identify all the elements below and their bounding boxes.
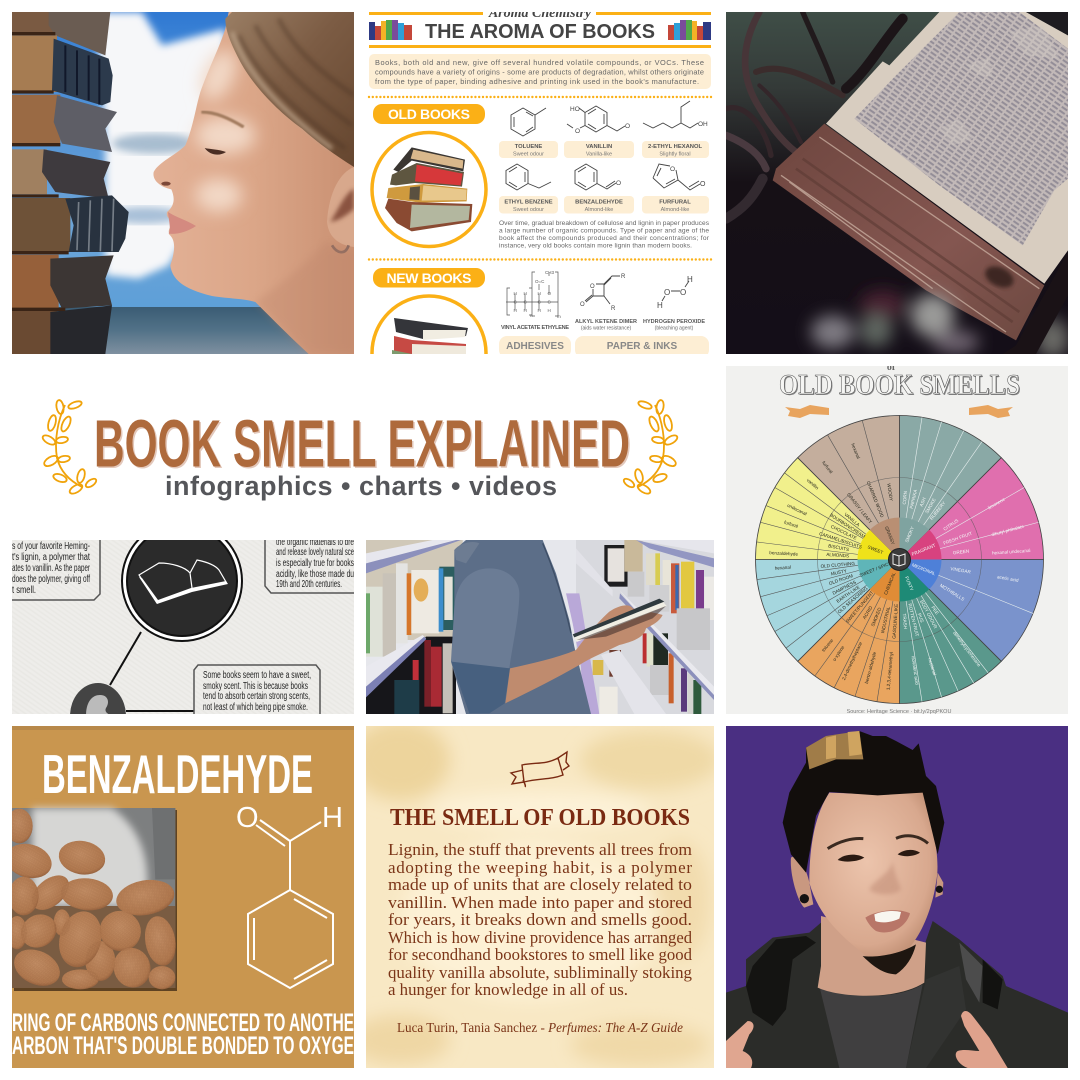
intro text block: compounds have a variety of origins - some are products of degradation, whilst others originate — [375, 68, 704, 76]
hand and forearm holding a book — [505, 599, 667, 703]
wheel labels, dark text: OLD CLOTHING — [820, 561, 856, 569]
icon: book row right — [668, 20, 711, 40]
wheel labels, light text: MOTHBALLS — [939, 583, 965, 602]
wheel labels, light text: CORN — [902, 491, 908, 505]
quote text: for years, it breaks down and smells good. — [388, 910, 692, 929]
icon: book row left — [369, 20, 412, 40]
label: hydrogen peroxide: (bleaching agent) — [655, 326, 694, 332]
dark spokes left half — [757, 420, 893, 702]
badge: adhesives: ADHESIVES — [506, 341, 564, 352]
badge: old books — [373, 104, 485, 124]
quote text: a hunger for knowledge in all of us. — [388, 980, 628, 999]
molecule: hydrogen peroxide: H — [657, 301, 663, 310]
wheel labels, light text: PUS — [917, 612, 925, 623]
wheel labels, dark text: EARTH-LIKE — [836, 585, 861, 604]
text block: old books explanation — [499, 220, 710, 250]
molecule: toluene — [511, 108, 546, 136]
mouth with teeth — [865, 910, 910, 932]
wheel labels, dark text — [769, 443, 899, 690]
molecule: benzaldehyde — [575, 164, 621, 190]
molecule: vinyl acetate ethylene: C — [524, 300, 528, 304]
title block — [42, 399, 678, 501]
wheel labels, dark text: CARAMEL/BISCUITS — [819, 531, 863, 550]
quote text: for secondhand bookstores to smell like good — [388, 945, 692, 964]
icon: laurel left — [41, 399, 98, 496]
wheel labels, dark text: CHARRED WOOD — [866, 480, 885, 519]
right bookshelf — [566, 540, 714, 714]
wheel labels, dark text: GRASSY / LEAFY — [846, 492, 873, 525]
white spokes right half — [906, 417, 1039, 702]
wheel labels, dark text: BOURBON/CREAM — [829, 512, 866, 539]
nose shadow — [869, 859, 901, 894]
compound label: 2-ethyl hexanol: Slightly floral — [659, 152, 691, 158]
badge: adhesives — [499, 336, 571, 358]
text box: lignin: ates to vanillin. As the paper — [12, 563, 90, 574]
molecule: vinyl acetate ethylene: m — [557, 314, 561, 319]
face — [809, 791, 937, 960]
wheel labels, light text — [902, 488, 1031, 685]
text box: lignin: t's lignin, a polymer that — [12, 552, 90, 563]
wheel labels, dark text: OLD SEASONING — [837, 586, 869, 615]
badge: new books — [373, 268, 485, 288]
wheel labels, dark text: ALMONDS — [826, 552, 849, 558]
compound label: 2-ethyl hexanol: 2-ETHYL HEXANOL — [648, 144, 702, 150]
label: hydrogen peroxide: HYDROGEN PEROXIDE — [643, 319, 705, 325]
woman's face in profile — [153, 12, 354, 354]
molecule: vinyl acetate ethylene — [506, 270, 561, 319]
intro text block: Books, both old and new, give off several hundred volatile compounds, or VOCs. These — [375, 58, 704, 67]
wheel labels, dark text: furfural — [821, 460, 834, 474]
woman's hair — [225, 12, 354, 167]
molecule: furfural — [653, 164, 706, 190]
caption text — [12, 1009, 354, 1060]
wheel labels, dark text: ACRID — [862, 605, 874, 620]
text box: lignin: t smell. — [12, 585, 36, 596]
ear and earring — [327, 167, 354, 252]
compound label: benzaldehyde: BENZALDEHYDE — [575, 200, 623, 206]
compound label: toluene — [499, 141, 558, 158]
left ear and gauge — [791, 857, 813, 908]
wheel labels, light text: TRASH — [902, 613, 908, 629]
wheel labels, light text: FUSTY — [904, 576, 914, 592]
subtitle: infographics • charts • videos — [165, 471, 557, 501]
wheel labels, dark text: INDUSTRIAL — [880, 606, 891, 634]
panel: aroma of books infographic — [368, 12, 712, 354]
heading: the smell of old books: THE SMELL OF OLD BOOKS — [390, 805, 690, 831]
wheel labels, dark text: benzo-aldehyde — [864, 651, 877, 684]
molecule: hydrogen peroxide: O — [680, 288, 686, 297]
wheel labels, dark text: DAMPNESS — [832, 580, 857, 596]
icon: ribbon banner — [511, 752, 569, 787]
molecule: vanillin: O — [575, 128, 580, 135]
intro text block — [369, 54, 711, 89]
heading: THE AROMA OF BOOKS — [425, 21, 655, 43]
wheel labels, light text: isovaleric acid — [911, 656, 920, 685]
icon: open book medallion — [122, 521, 242, 641]
compound label: furfural — [642, 196, 709, 214]
molecule: vinyl acetate ethylene: H — [538, 308, 541, 313]
compound label: toluene: Sweet odour — [513, 152, 544, 158]
molecule: vinyl acetate ethylene: H — [524, 291, 527, 296]
icon: laurel right — [622, 399, 679, 496]
icon: wheel hub book — [888, 548, 910, 570]
badge: old books: OLD BOOKS — [388, 106, 470, 122]
text block: old books explanation: instance, very old books contain more lignin than modern books. — [499, 242, 692, 250]
wheel chart — [756, 416, 1044, 704]
wheel labels, dark text: toluene — [821, 638, 835, 653]
wheel labels, light text: heptanal — [927, 657, 937, 676]
molecule: vanillin — [567, 106, 630, 135]
left hand — [726, 1021, 754, 1068]
top shade — [12, 726, 354, 730]
text box: pipe smoke — [194, 665, 320, 714]
text box: organic materials — [265, 537, 354, 593]
compound label: ethyl benzene — [499, 196, 558, 214]
old book pages — [826, 12, 1068, 284]
molecule: alkyl ketene dimer: O — [580, 302, 585, 308]
t-shirt — [819, 984, 923, 1068]
panel: man reading in library photo — [366, 540, 714, 714]
wheel labels, dark text: 1,2,3,4-tetramethyl — [886, 652, 894, 690]
quote text: made up of units that are closely related to — [388, 875, 692, 894]
wheel labels, light text: hexanal undecanal — [992, 548, 1031, 556]
compound label: benzaldehyde: Almond-like — [585, 207, 613, 213]
molecule: vinyl acetate ethylene: H — [524, 308, 527, 313]
molecule: vanillin: HO — [570, 106, 580, 113]
wheel labels, light text: dimethylcyclohexane — [952, 630, 982, 668]
text block: old books explanation: book affect the compounds produced and their concentrations; for — [499, 235, 710, 242]
quote text: adopting the weeping habit, is a polymer — [388, 858, 692, 877]
header bars and script title — [369, 6, 711, 21]
photo: almonds in bowl — [2, 808, 179, 993]
illustration: new book stack in circle — [372, 296, 486, 410]
quote text: Which is how divine providence has arranged — [388, 928, 692, 947]
nostril and lips — [161, 182, 196, 234]
wheel labels, light text: ROTTEN FRUIT — [907, 603, 920, 637]
compound label: 2-ethyl hexanol — [642, 141, 709, 158]
wheel labels, light text: PEE — [930, 605, 940, 615]
panel: benzaldehyde card — [12, 726, 354, 1068]
badge: new books: NEW BOOKS — [386, 270, 472, 286]
wheel labels, dark text: OLD ROOM — [828, 573, 854, 586]
wheel labels, light text: limonene — [987, 496, 1006, 510]
molecule: alkyl ketene dimer: O — [590, 284, 595, 290]
old book fore edge — [773, 124, 1044, 340]
quote text: Lignin, the stuff that prevents all trees from — [388, 840, 692, 859]
wheel labels, light text: VINEGAR — [950, 566, 972, 575]
wheel labels, dark text: SWEET / SPICY — [859, 561, 892, 578]
wheel labels, light text: FRAGRANT — [911, 543, 936, 557]
molecule: vinyl acetate ethylene: O=C — [535, 279, 545, 284]
icon: pipe smoker medallion — [70, 683, 126, 749]
molecule: vinyl acetate ethylene: CH3 — [545, 270, 554, 275]
text box: lignin: does the polymer, giving off — [12, 574, 90, 585]
wheel labels, light text: acetic acid — [997, 574, 1019, 583]
wheel labels, dark text: VANILLA — [843, 512, 861, 528]
jacket — [726, 921, 1068, 1068]
wheel labels, dark text: GRASSY — [884, 526, 896, 545]
heading: old book smells: OLD BOOK SMELLS — [780, 370, 1021, 402]
molecule: benzaldehyde structure: O — [236, 802, 259, 834]
wheel labels, light text: GREEN — [953, 548, 969, 555]
compound label: furfural: FURFURAL — [659, 200, 691, 206]
dried twigs — [726, 12, 903, 219]
molecule: benzaldehyde: O — [616, 180, 621, 187]
molecule: vinyl acetate ethylene: C — [514, 300, 518, 304]
molecule: hydrogen peroxide: H — [687, 275, 693, 284]
parchment texture — [350, 720, 720, 1067]
wheel labels, light text: MEDICINAL — [911, 562, 937, 576]
wheel labels, dark text: hexanal — [850, 443, 861, 459]
panel: woman smelling books photo — [12, 12, 354, 354]
wheel labels, dark text: MUSTY — [830, 568, 847, 577]
molecule: vanillin: O — [625, 123, 630, 130]
wheel labels, light text: SMOKY — [904, 526, 915, 543]
illustration: old book stack in circle — [372, 132, 486, 246]
goatee — [863, 944, 916, 974]
wheel labels, light text: CITRUS — [942, 518, 959, 532]
wheel labels, dark text: undecanal — [786, 503, 808, 516]
panel: smell of old books quote — [366, 726, 714, 1068]
wheel labels, dark text: SMOKED — [870, 606, 883, 627]
text block: old books explanation: a large number of organic compounds. Type of paper and age of the — [499, 228, 709, 234]
compound label: vanillin — [564, 141, 634, 158]
molecule: alkyl ketene dimer: R — [621, 274, 626, 280]
badge: paper and inks: PAPER & INKS — [607, 341, 678, 352]
wheel labels, dark text: CHEMICAL — [883, 571, 897, 596]
compound label: vanillin: Vanilla-like — [586, 152, 612, 158]
wheel labels, dark text: GASOLINE-LIKE — [891, 604, 899, 639]
badge: paper and inks — [575, 336, 709, 358]
wheel labels, dark text: vanillin — [806, 478, 820, 491]
molecule: vinyl acetate ethylene: H — [538, 291, 541, 296]
molecule: hydrogen peroxide: O — [664, 288, 670, 297]
quote text: vanillin. When made into paper and stored — [388, 893, 693, 912]
compound label: toluene: TOLUENE — [515, 144, 542, 150]
wheel labels, light text: FRESH FRUIT — [943, 531, 973, 546]
wheel labels, dark text: benzaldehyde — [769, 550, 799, 557]
label: hydrogen peroxide — [643, 319, 705, 332]
panel: old book chemistry paper chart — [12, 540, 354, 714]
molecule: vinyl acetate ethylene: O — [548, 291, 552, 296]
wheel labels, dark text: furfural — [784, 520, 799, 529]
blurred flowers in foreground — [811, 290, 1069, 359]
right hand — [956, 1011, 1008, 1068]
molecule: vinyl acetate ethylene: C — [548, 300, 552, 304]
wheel labels, light text: SMOKE — [924, 497, 937, 514]
wheel labels, dark text: o-xylene — [832, 644, 846, 662]
connector lines — [110, 632, 194, 711]
molecule: alkyl ketene dimer — [580, 274, 626, 312]
left bookshelf — [366, 540, 463, 714]
compound label: ethyl benzene: ETHYL BENZENE — [504, 200, 553, 206]
sky and clouds — [12, 12, 354, 312]
wheel labels, dark text: BISCUITS — [828, 543, 850, 552]
wheel labels, dark text: hexanal — [775, 565, 791, 571]
panel: dark old open book photo — [726, 12, 1068, 354]
molecule: vinyl acetate ethylene: H — [548, 308, 551, 313]
neck — [818, 916, 926, 996]
molecule: vinyl acetate ethylene: n — [530, 313, 533, 318]
compound label: vanillin: VANILLIN — [586, 144, 612, 150]
molecule: benzaldehyde structure — [236, 802, 343, 988]
ring and inner wedges — [818, 478, 982, 642]
wheel labels, light text: RUBBERY — [929, 500, 946, 521]
wedge: outer ring colours — [756, 416, 1044, 704]
label: alkyl ketene dimer: ALKYL KETENE DIMER — [575, 319, 637, 325]
molecule: 2-ethyl hexanol: OH — [698, 121, 708, 128]
wheel labels, light text: PAPRIKA — [909, 488, 918, 509]
text box: lignin — [12, 540, 100, 600]
label: alkyl ketene dimer — [575, 319, 637, 332]
wheel labels, light text: ASH — [919, 497, 927, 507]
wheel labels, light text: dibutyl phthalate — [991, 524, 1025, 537]
icon: orange hand right — [969, 405, 1013, 418]
quote text: quality vanilla absolute, subliminally stoking — [388, 963, 692, 982]
man in grey hoodie — [451, 540, 591, 714]
panel: old book smells wheel — [726, 366, 1068, 714]
panel: video presenter photo — [726, 726, 1068, 1068]
molecule: furfural: O — [700, 181, 706, 188]
wheel labels, dark text: WOODY — [886, 483, 894, 501]
intro text block: from the type of paper, binding adhesive and printing ink used in the book's manufacture. — [375, 77, 699, 86]
compound label: benzaldehyde — [564, 196, 634, 214]
eyes and brows — [828, 836, 928, 862]
wheel labels, light text: BODY ODOUR — [919, 599, 938, 630]
quote text — [388, 840, 693, 999]
text block: old books explanation: Over time, gradual breakdown of cellulose and lignin in paper produces — [499, 220, 710, 227]
heading: old book smells: OLD BOOK SMELLS — [779, 369, 1020, 401]
molecule: hydrogen peroxide — [657, 275, 693, 310]
dark table corner — [1003, 252, 1068, 354]
stack of old books — [12, 12, 129, 354]
molecule: benzaldehyde structure: H — [322, 802, 343, 834]
label: alkyl ketene dimer: (aids water resistance) — [581, 326, 631, 332]
molecule: vinyl acetate ethylene: C — [538, 300, 542, 304]
molecule: vinyl acetate ethylene: H — [514, 308, 517, 313]
closed eye and brow — [201, 112, 244, 155]
icon: orange hand left — [785, 405, 829, 418]
compound label: furfural: Almond-like — [661, 207, 689, 213]
wheel labels, dark text: SWEET/PUNGENT — [845, 590, 875, 624]
sea horizon — [12, 307, 354, 354]
spiky hair with blonde tips — [783, 731, 944, 873]
molecule: ethyl benzene — [506, 164, 551, 190]
wheel labels, dark text: SWEET — [867, 544, 884, 555]
right ear and gauge — [935, 873, 943, 898]
attribution: Luca Turin, Tania Sanchez - Perfumes: The A-Z Guide — [397, 1021, 683, 1036]
molecule: 2-ethyl hexanol — [643, 101, 708, 128]
molecule: vinyl acetate ethylene: H — [514, 291, 517, 296]
jaw shadow — [255, 242, 354, 354]
text box: lignin: s of your favorite Heming- — [12, 541, 90, 552]
skin highlights — [194, 45, 255, 212]
molecule: furfural: O — [670, 166, 675, 173]
compound label: ethyl benzene: Sweet odour — [513, 207, 544, 213]
wheel labels, dark text: CHOCOLATE — [830, 524, 858, 541]
label: vinyl acetate ethylene: VINYL ACETATE ETHYLENE — [501, 325, 569, 331]
wheel labels, dark text: 2,4-dimethylheptane — [841, 641, 863, 681]
molecule: alkyl ketene dimer: R — [611, 306, 616, 312]
